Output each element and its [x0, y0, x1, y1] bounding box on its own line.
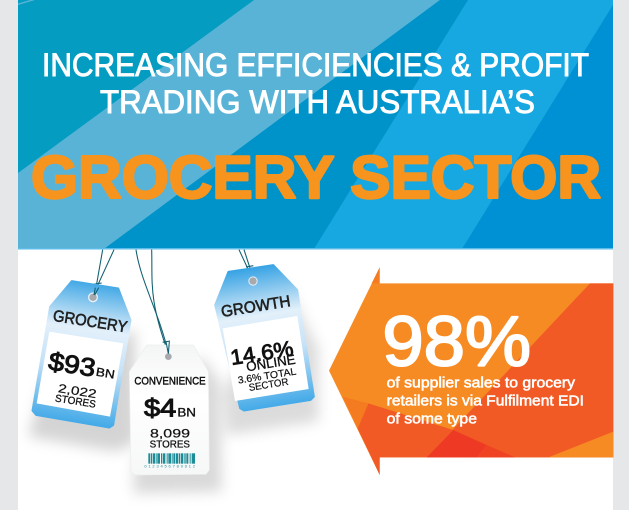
- barcode: 0123456789012: [144, 463, 196, 468]
- string: [239, 250, 253, 278]
- title line 2: TRADING WITH AUSTRALIA’S: [100, 84, 535, 120]
- callout text: of some type: [387, 411, 477, 427]
- barcode: [144, 453, 196, 468]
- store count: 8,099: [150, 427, 190, 441]
- string: [93, 250, 114, 293]
- label: GROCERY: [52, 308, 129, 336]
- callout text: retailers is via Fulfilment EDI: [387, 393, 584, 409]
- online percentage: 14.6%: [229, 336, 295, 370]
- white content panel: [18, 249, 613, 510]
- title highlight: GROCERY SECTOR: [31, 144, 601, 211]
- total share: 3.6% TOTAL: [237, 366, 298, 387]
- headline percentage: 98%: [382, 301, 531, 380]
- amount: $4: [144, 395, 176, 423]
- store count: 2,022: [57, 381, 98, 401]
- online label: ONLINE: [245, 352, 297, 374]
- amount: $93: [46, 348, 98, 383]
- tag: grocery: [32, 250, 131, 428]
- callout text: [387, 376, 584, 427]
- title line 1: INCREASING EFFICIENCIES & PROFIT: [42, 47, 589, 83]
- callout arrow: [329, 267, 613, 475]
- tag shadows: [28, 285, 318, 493]
- callout text: of supplier sales to grocery: [387, 376, 576, 392]
- tag: growth: [215, 250, 314, 411]
- label: GROWTH: [220, 293, 292, 321]
- header banner: [18, 0, 613, 250]
- label: CONVENIENCE: [134, 375, 206, 387]
- unit: BN: [95, 365, 116, 382]
- sector label: SECTOR: [248, 377, 289, 394]
- stores label: STORES: [150, 439, 190, 450]
- string: [136, 250, 170, 353]
- price tags group: [28, 250, 318, 493]
- stores label: STORES: [54, 393, 97, 411]
- tag: convenience: [129, 250, 209, 475]
- unit: BN: [177, 405, 196, 419]
